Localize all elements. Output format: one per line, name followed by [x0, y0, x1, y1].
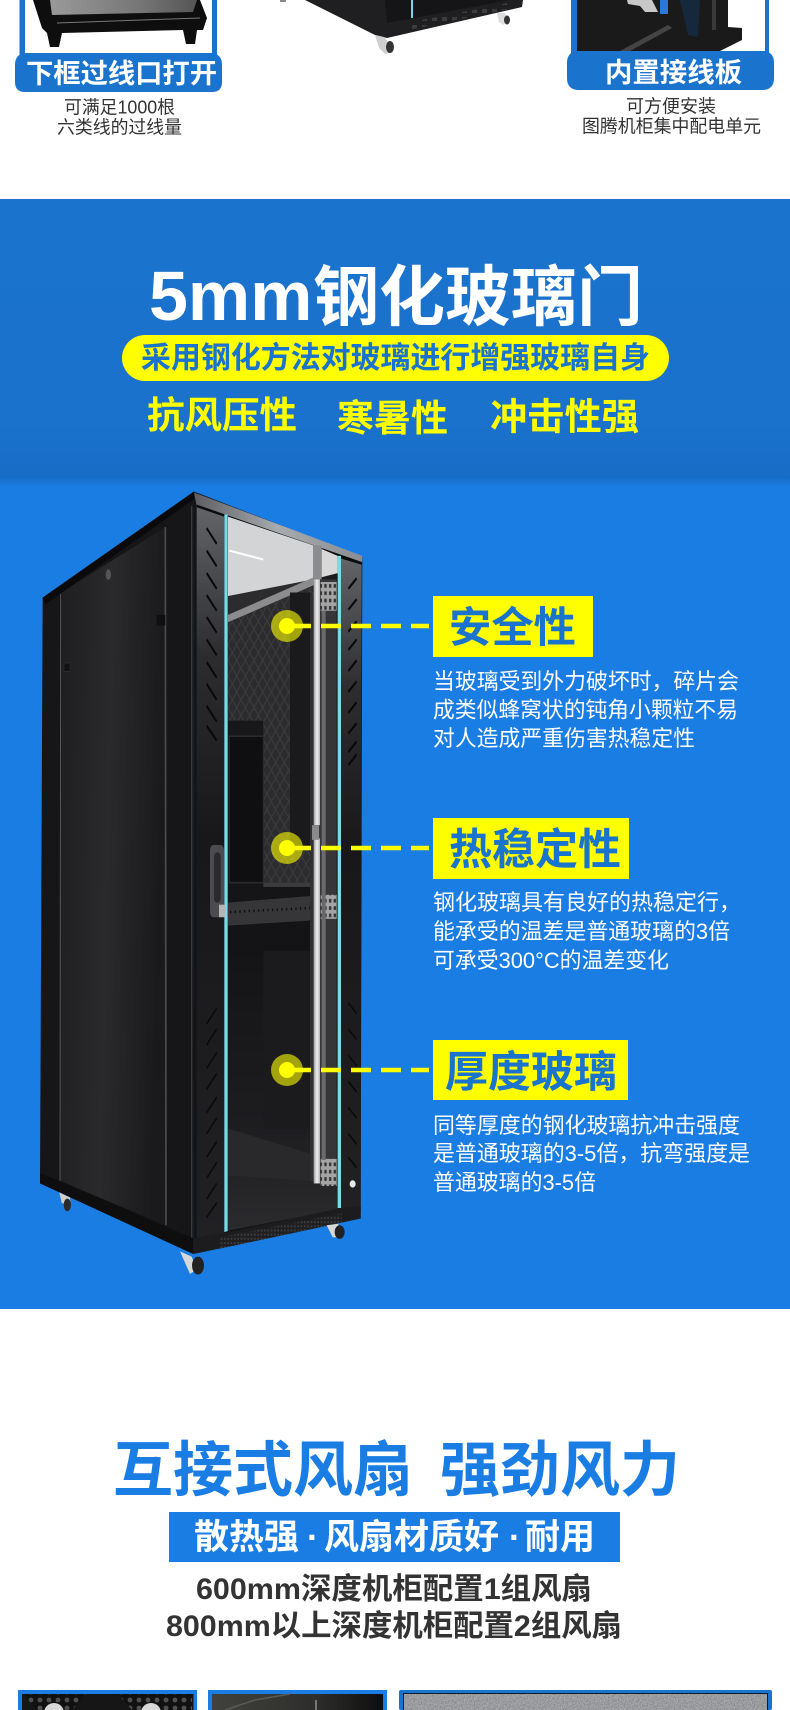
- heading: 强劲风力: [440, 1437, 680, 1504]
- cyan glass edges: [224, 515, 228, 1232]
- panel: interlocking fans: [113, 1437, 680, 1643]
- subtitle pill: [122, 335, 669, 381]
- label text: 内置接线板: [605, 58, 742, 88]
- subheading bar: 耐用: [525, 1518, 595, 1557]
- label pill: [15, 53, 222, 92]
- caption: 可满足1000根: [64, 98, 175, 118]
- feature: glass thickness: [433, 1040, 750, 1195]
- thumbnail: cabinet interior: [577, 0, 742, 51]
- panel: glass features background: [0, 477, 790, 1309]
- description: 同等厚度的钢化玻璃抗冲击强度: [433, 1113, 740, 1138]
- base plinth: [193, 1206, 361, 1254]
- mesh interior: [228, 585, 315, 883]
- right door frame: [341, 558, 362, 1212]
- reflection: [228, 517, 313, 596]
- subheading bar: 风扇材质好: [324, 1518, 499, 1557]
- casters: [59, 1192, 345, 1274]
- panel: lower frame cable port: [15, 0, 222, 138]
- door handle: [210, 845, 225, 917]
- title: 5mm: [149, 257, 312, 335]
- configuration text: [166, 1573, 622, 1643]
- subtitle text: 采用钢化方法对玻璃进行增强玻璃自身: [141, 342, 650, 375]
- shelf band: [228, 896, 313, 926]
- thumbnail frame: [20, 0, 217, 56]
- thumbnail frame: [571, 0, 769, 54]
- photo: fan units: [18, 1690, 197, 1710]
- label pill: [567, 51, 774, 90]
- photo: fan housing: [208, 1690, 387, 1710]
- callout marker 1: [271, 610, 429, 642]
- heading: 热稳定性: [449, 826, 621, 874]
- description: 对人造成严重伤害热稳定性: [433, 726, 695, 751]
- glass: [228, 517, 338, 1231]
- side panel: [40, 492, 197, 1254]
- description: 普通玻璃的3-5倍: [433, 1170, 596, 1195]
- feature: safety: [433, 596, 739, 751]
- caption: [57, 98, 182, 138]
- subheading bar: ·: [509, 1518, 521, 1557]
- description: 钢化玻璃具有良好的热稳定行，: [433, 890, 741, 915]
- description: 可承受300°C的温差变化: [433, 948, 669, 973]
- caption: 六类线的过线量: [57, 118, 182, 138]
- title: 钢化玻璃门: [313, 260, 643, 334]
- thumbnail: cabinet base: [33, 0, 207, 47]
- label text: 下框过线口打开: [26, 59, 217, 89]
- caption: 图腾机柜集中配电单元: [582, 116, 761, 136]
- callout marker 3: [271, 1054, 429, 1086]
- subheading bar: ·: [307, 1518, 319, 1557]
- subheading bar: 散热强: [194, 1518, 299, 1557]
- cabinet base thumbnail: [280, 0, 523, 54]
- feature: thermal stability: [433, 818, 741, 973]
- feature words: [147, 395, 639, 439]
- heading: 互接式风扇: [113, 1437, 413, 1504]
- caption: 可方便安装: [626, 96, 716, 116]
- heading: [433, 596, 593, 657]
- configuration text: 600mm深度机柜配置1组风扇: [196, 1573, 592, 1606]
- heading: 厚度玻璃: [445, 1049, 617, 1097]
- description: 能承受的温差是普通玻璃的3倍: [433, 919, 730, 944]
- perforated rail: [320, 579, 337, 1186]
- heading: 安全性: [449, 604, 576, 651]
- configuration text: 800mm以上深度机柜配置2组风扇: [166, 1610, 622, 1643]
- cabinet illustration: [40, 492, 362, 1274]
- description: [433, 1113, 750, 1195]
- caption: [582, 96, 761, 136]
- front door: [193, 492, 362, 1254]
- panel: glass door header: [0, 199, 790, 477]
- description: 是普通玻璃的3-5倍，抗弯强度是: [433, 1141, 750, 1166]
- right vent slashes: [348, 578, 357, 765]
- header background: [0, 199, 790, 477]
- subheading bar: [169, 1512, 620, 1562]
- callout marker 2: [271, 832, 429, 864]
- feature words: 冲击性强: [490, 396, 639, 438]
- description: 成类似蜂窝状的钝角小颗粒不易: [433, 698, 738, 722]
- white rail: [314, 579, 320, 825]
- heading: [433, 818, 629, 879]
- description: [433, 890, 741, 973]
- left vent slashes: [207, 528, 217, 740]
- panel: built-in terminal board: [567, 0, 774, 136]
- top rim: [194, 493, 362, 564]
- description: 当玻璃受到外力破坏时，碎片会: [433, 669, 739, 694]
- feature words: 寒暑性: [337, 398, 448, 439]
- left door frame: [197, 507, 224, 1241]
- feature words: 抗风压性: [147, 395, 297, 436]
- photo: textured panel: [399, 1690, 772, 1710]
- description: [433, 669, 739, 751]
